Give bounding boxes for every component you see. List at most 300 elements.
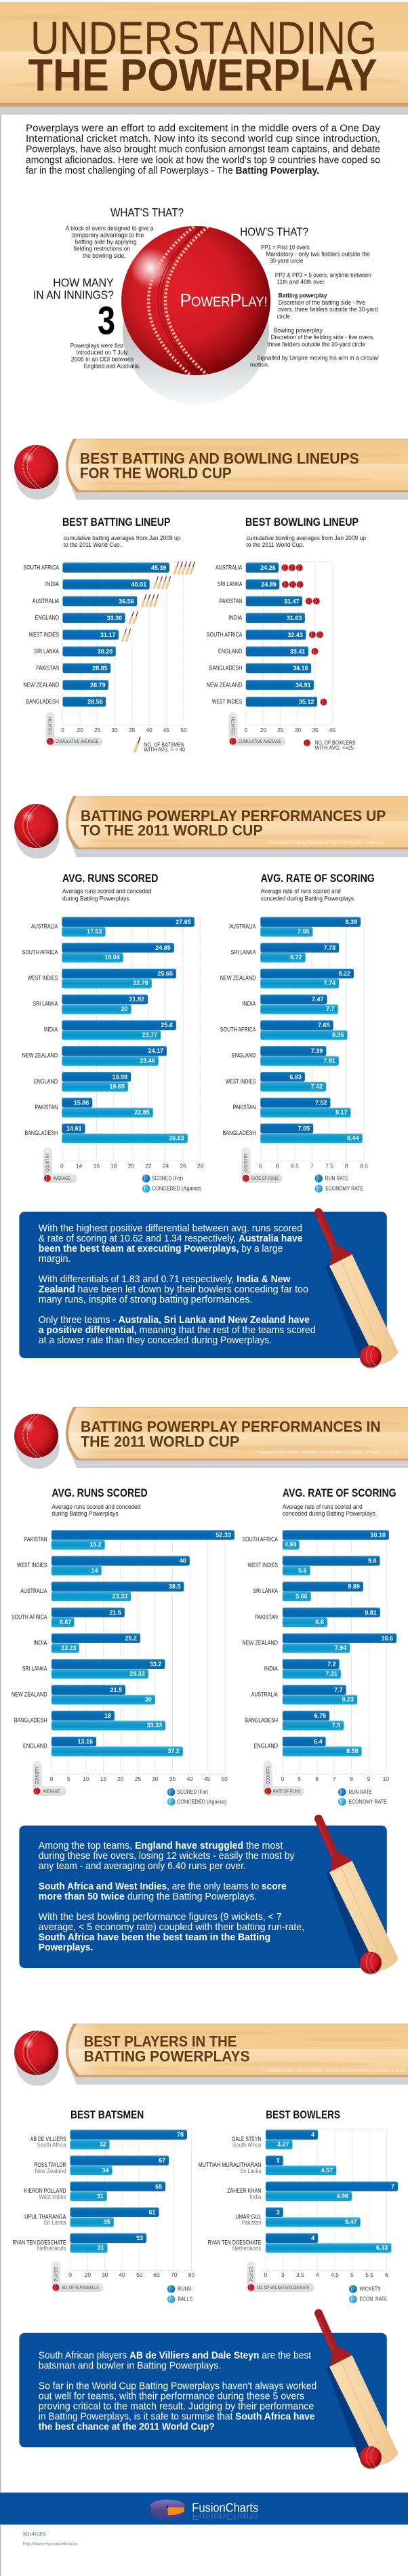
sources bbox=[23, 2531, 77, 2547]
heading: how's that: HOW'S THAT? bbox=[240, 225, 308, 238]
bars: West Indies: 25.65 bbox=[157, 970, 173, 977]
bars: New Zealand: 10.6 bbox=[381, 1635, 393, 1642]
bar: West Indies bbox=[29, 630, 119, 640]
section header: performances up to 2011: TO THE 2011 WORLD CUP bbox=[81, 822, 263, 839]
legend: scored and conceded: SCORED (For) bbox=[177, 1788, 208, 1795]
text: what's that: batting side by applying bbox=[75, 239, 137, 246]
bars: Australia: AUSTRALIA bbox=[251, 1691, 278, 1697]
bars: Ryan ten Doeschate: 4 bbox=[311, 2235, 314, 2242]
bar: Australia: 36.56 bbox=[119, 598, 134, 604]
axis legend: cumulative average: CUMULATIVE AVERAGE bbox=[56, 738, 99, 744]
bars: Sri Lanka: SRI LANKA bbox=[231, 948, 256, 955]
text: how's that: PP1 = First 10 overs bbox=[261, 244, 310, 251]
axis labels bbox=[68, 2271, 195, 2278]
bars: Sri Lanka: 20 bbox=[121, 1005, 127, 1012]
axis labels: 6 bbox=[315, 1775, 319, 1782]
bars: New Zealand: NEW ZEALAND bbox=[12, 1691, 47, 1697]
bars: South Africa: 7.65 bbox=[318, 1022, 330, 1029]
axis labels: 20 bbox=[117, 1775, 124, 1782]
legend: runs and balls bbox=[167, 2285, 192, 2303]
bars: New Zealand: 21.5 bbox=[110, 1687, 122, 1693]
section header: best players: BATTING POWERPLAYS bbox=[84, 2048, 249, 2064]
axis labels: 8 bbox=[345, 1162, 348, 1169]
bar: Bangladesh: BANGLADESH bbox=[209, 665, 242, 672]
axis legend: cumulative average: COUNTRY bbox=[230, 716, 236, 735]
bar: India bbox=[45, 579, 150, 590]
bar: Pakistan: PAKISTAN bbox=[36, 665, 59, 672]
bars: Pakistan: 8.17 bbox=[335, 1109, 347, 1115]
axis labels: 7 bbox=[310, 1162, 314, 1169]
bars: India: 25.6 bbox=[161, 1022, 173, 1029]
bars: Australia: 7.7 bbox=[334, 1687, 343, 1693]
panel heading: avg runs scored 2011: during Batting Powerplays. bbox=[52, 1510, 120, 1518]
callout: conclusion: So far in the World Cup Batting Powerplays haven't always worked bbox=[39, 2381, 317, 2392]
callout: conclusion: batsman and bowler in Batting Powerplays. bbox=[39, 2360, 221, 2372]
text: how's that: Bowling powerplay bbox=[274, 327, 323, 334]
axis labels: 6.5 bbox=[291, 1162, 299, 1169]
bars: India bbox=[33, 1634, 140, 1653]
bars: Bangladesh: BANGLADESH bbox=[223, 1130, 256, 1136]
bar: Sri Lanka bbox=[34, 647, 116, 657]
section header: best lineups: BEST BATTING AND BOWLING LINEUPS bbox=[80, 450, 359, 467]
legend: runs and balls: RUNS bbox=[178, 2286, 191, 2292]
bars: Sri Lanka bbox=[33, 995, 148, 1014]
bars: Australia: 27.65 bbox=[176, 919, 191, 925]
text: how's that: Batting powerplay bbox=[279, 292, 327, 300]
axis labels: 45 bbox=[163, 727, 169, 733]
heading: how many: HOW MANY bbox=[53, 276, 114, 290]
bars: India: 7.7 bbox=[326, 1005, 335, 1012]
legend: scored and conceded bbox=[167, 1788, 227, 1806]
text: how's that: 30-yard circle bbox=[270, 258, 304, 265]
intro paragraph: far in the most challenging of all Powerplays - The Batting Powerplay. bbox=[26, 166, 319, 176]
bars: West Indies bbox=[226, 1072, 326, 1092]
axis labels bbox=[264, 2271, 388, 2278]
legend: scored and conceded: SCORED (For) bbox=[152, 1175, 183, 1182]
axis labels: 28 bbox=[197, 1162, 204, 1169]
section header: performances in 2011: ** Updated till the match between Pakistan and Zimbabwe on March 14, 2011 bbox=[255, 1450, 399, 1455]
callout: conclusion bbox=[19, 2333, 387, 2447]
bars: Australia: 8.23 bbox=[342, 1696, 354, 1703]
bars: Pakistan: 15.2 bbox=[89, 1541, 102, 1548]
axis labels bbox=[281, 1775, 389, 1782]
section header: performances in 2011: THE 2011 WORLD CUP bbox=[81, 1434, 239, 1450]
callout: powerplay performances bbox=[19, 1212, 387, 1358]
bars: South Africa: 10.18 bbox=[370, 1532, 386, 1539]
page left border bbox=[0, 115, 1, 2576]
axis labels: 50 bbox=[136, 2271, 143, 2278]
axis labels bbox=[259, 1162, 368, 1169]
section header: performances in 2011: ** bbox=[240, 1436, 247, 1444]
axis labels: 35 bbox=[312, 727, 319, 733]
axis labels: 8 bbox=[350, 1775, 353, 1782]
bars: England: 7.39 bbox=[311, 1047, 323, 1054]
section header: best players: ** Updated till the match between Pakistan and Zimbabwe on March 14, 2011 bbox=[261, 2069, 405, 2073]
bars: New Zealand: NEW ZEALAND bbox=[242, 1639, 278, 1646]
bars: Sri Lanka: SRI LANKA bbox=[33, 1001, 58, 1007]
bars: Australia: 7.05 bbox=[298, 928, 309, 935]
bar: West Indies: 35.12 bbox=[299, 699, 314, 706]
bar: South Africa: SOUTH AFRICA bbox=[23, 564, 59, 571]
bars: New Zealand: 24.17 bbox=[148, 1047, 163, 1054]
bars: Australia bbox=[31, 917, 195, 937]
axis legend: average: COUNTRY bbox=[34, 1766, 40, 1784]
axis labels: 10 bbox=[83, 1775, 89, 1782]
bar: New Zealand bbox=[23, 680, 108, 690]
bars: Kieron Pollard: West Indies bbox=[39, 2193, 66, 2200]
bars: Pakistan: 6.6 bbox=[315, 1619, 324, 1626]
axis labels: 20 bbox=[128, 1162, 134, 1169]
bars: England: ENGLAND bbox=[232, 1052, 256, 1059]
axis legend: wickets and economy bbox=[247, 2261, 314, 2292]
legend: run rate and economy rate: ECONOMY RATE bbox=[348, 1798, 387, 1805]
bars: Bangladesh: BANGLADESH bbox=[245, 1716, 278, 1723]
bar: West Indies: WEST INDIES bbox=[212, 698, 242, 705]
text: how's that: Discretion of the batting side - five bbox=[279, 299, 365, 307]
legend: batsmen: WITH AVG. > = 40 bbox=[144, 746, 185, 753]
bars: West Indies: WEST INDIES bbox=[248, 1562, 278, 1569]
text: first introduced: 2005 in an ODI between bbox=[71, 355, 134, 363]
bars: Australia: 23.33 bbox=[113, 1593, 127, 1600]
bar: Australia: 24.26 bbox=[260, 564, 276, 571]
icons: bowlers with average under 25 bbox=[281, 564, 327, 706]
axis labels bbox=[50, 1775, 228, 1782]
legend: run rate and economy rate: ECONOMY RATE bbox=[325, 1185, 364, 1192]
axis labels: 0 bbox=[259, 1162, 262, 1169]
bars: West Indies: 9.6 bbox=[368, 1558, 377, 1564]
axis labels: 20 bbox=[77, 727, 83, 733]
axis legend: average: COUNTRY bbox=[45, 1153, 51, 1172]
bars: Ryan ten Doeschate: 53 bbox=[136, 2235, 143, 2242]
text: what's that: A block of overs designed to give a bbox=[66, 225, 154, 232]
legend: run rate and economy rate: RUN RATE bbox=[325, 1175, 349, 1182]
bars: India bbox=[44, 1020, 176, 1040]
panel heading: avg runs scored: during Batting Powerplays. bbox=[62, 895, 131, 902]
bars: New Zealand bbox=[242, 1634, 396, 1653]
axis labels: 10 bbox=[383, 1775, 389, 1782]
chart: avg rate of scoring 2011 bbox=[242, 1530, 396, 1782]
bars: India: 7.2 bbox=[327, 1661, 336, 1668]
legend: wickets and economy rate: WICKETS bbox=[359, 2286, 381, 2292]
callout: powerplay performances: Zealand have been let down by their bowlers conceding far too bbox=[39, 1284, 308, 1295]
bar: Pakistan: 28.85 bbox=[92, 665, 108, 672]
bars: Ryan ten Doeschate: 6.33 bbox=[376, 2244, 388, 2251]
axis labels: 5 bbox=[298, 1775, 301, 1782]
bar: India: 31.63 bbox=[287, 615, 302, 621]
bars: Australia: 8.39 bbox=[345, 919, 357, 925]
bar: Pakistan: 31.47 bbox=[284, 598, 300, 604]
bars: New Zealand: 7.94 bbox=[335, 1645, 346, 1651]
bars: England: ENGLAND bbox=[34, 1078, 58, 1085]
legend: scored and conceded: CONCEDED (Against) bbox=[177, 1798, 227, 1805]
bars: Ryan ten Doeschate bbox=[12, 2233, 146, 2253]
axis labels: 20 bbox=[85, 2271, 91, 2278]
axis legend: rate of runs bbox=[263, 1761, 304, 1796]
text: what's that: fielding restrictions on bbox=[74, 246, 130, 253]
axis labels: 5 bbox=[350, 2271, 354, 2278]
bars: Upul Tharanga: 61 bbox=[148, 2209, 156, 2216]
bars: Pakistan: 15.86 bbox=[74, 1099, 89, 1106]
axis labels bbox=[60, 1162, 204, 1169]
panel heading: avg rate of scoring 2011 bbox=[283, 1486, 396, 1518]
bars: Dale Steyn: DALE STEYN bbox=[232, 2136, 261, 2142]
bar: Sri Lanka: 30.20 bbox=[98, 649, 113, 655]
bars: England: 8.58 bbox=[346, 1748, 359, 1754]
text: what's that bbox=[66, 225, 154, 260]
bars: Kieron Pollard: KIERON POLLARD bbox=[24, 2187, 66, 2194]
callout: 2011 world cup performances: Among the top teams, England have struggled the most bbox=[39, 1840, 283, 1851]
bars: Umar Gul bbox=[235, 2208, 361, 2227]
legend: wickets and economy rate: ECON. RATE bbox=[359, 2296, 388, 2303]
callout: 2011 world cup performances: South Africa have been the best team in the Batting bbox=[39, 1931, 270, 1943]
bars: South Africa: 4.93 bbox=[285, 1541, 297, 1548]
axis labels: 25 bbox=[94, 727, 101, 733]
axis legend: cumulative average bbox=[46, 712, 103, 746]
axis labels: 25 bbox=[277, 727, 284, 733]
legend: bowlers bbox=[304, 739, 356, 751]
axis legend: cumulative average bbox=[228, 712, 285, 746]
bars: Pakistan: PAKISTAN bbox=[24, 1536, 47, 1543]
bars: New Zealand: 8.22 bbox=[338, 970, 350, 977]
bars: New Zealand bbox=[12, 1685, 155, 1704]
bar: New Zealand: 28.79 bbox=[90, 682, 106, 689]
intro paragraph: International cricket match. Now into its second world cup since introduction, bbox=[26, 134, 380, 145]
bars: England: ENGLAND bbox=[23, 1742, 47, 1749]
bars: Sri Lanka bbox=[231, 943, 339, 963]
bars: Dale Steyn bbox=[232, 2130, 318, 2149]
callout: powerplay performances: With differentials of 1.83 and 0.71 respectively, India & New bbox=[39, 1273, 291, 1285]
bars: Zaheer Khan: 7 bbox=[391, 2183, 394, 2190]
ball shadow bbox=[123, 258, 269, 404]
bars: Sri Lanka bbox=[22, 1659, 165, 1678]
logo: pie chart bbox=[150, 2499, 184, 2520]
legend: run rate and economy rate bbox=[338, 1788, 387, 1806]
bars: Ryan ten Doeschate: RYAN TEN DOESCHATE bbox=[12, 2239, 66, 2246]
icons: batsmen with average over 40 bbox=[122, 562, 195, 642]
bars: New Zealand: NEW ZEALAND bbox=[22, 1052, 58, 1059]
bars: Sri Lanka: SRI LANKA bbox=[253, 1588, 278, 1594]
axis labels: 6 bbox=[385, 2271, 388, 2278]
intro paragraph: amongst aficionados. Here we look at how the world's top 9 countries have coped so bbox=[26, 155, 380, 166]
axis labels: 50 bbox=[222, 1775, 228, 1782]
panel heading: best batting lineup: BEST BATTING LINEUP bbox=[62, 516, 170, 528]
callout: 2011 world cup performances: more than 50 twice during the Batting Powerplays. bbox=[39, 1891, 257, 1902]
bars: Sri Lanka: 6.72 bbox=[290, 954, 302, 961]
text: what's that: temporary advantage to the bbox=[73, 231, 144, 239]
axis labels: 8.5 bbox=[360, 1162, 368, 1169]
legend: wickets and economy rate bbox=[349, 2285, 388, 2303]
bar: England: 33.41 bbox=[290, 649, 305, 655]
bars: Bangladesh: 7.05 bbox=[298, 1125, 310, 1132]
axis labels: 40 bbox=[186, 1775, 193, 1782]
bars: AB de Villiers: 78 bbox=[177, 2132, 184, 2138]
bars: Australia: 38.5 bbox=[169, 1583, 180, 1590]
bar: New Zealand: 34.91 bbox=[295, 682, 310, 689]
axis legend: average: AVERAGE bbox=[54, 1175, 70, 1181]
panel heading: avg runs scored: Average runs scored and conceded bbox=[62, 888, 151, 896]
legend: runs and balls: BALLS bbox=[178, 2296, 192, 2303]
text: how's that: Signalled by Umpire moving his arm in a circular bbox=[257, 355, 379, 362]
callout: 2011 world cup performances: South Africa and West Indies, are the only teams to score bbox=[39, 1881, 287, 1892]
bars: Australia bbox=[251, 1685, 357, 1704]
bars: Muttiah Muralitharan: 4.57 bbox=[321, 2167, 333, 2174]
section header: best players bbox=[14, 2024, 408, 2086]
bars: Sri Lanka: 8.89 bbox=[348, 1583, 360, 1590]
legend: run rate and economy rate bbox=[314, 1174, 364, 1193]
axis labels: 18 bbox=[110, 1162, 117, 1169]
bar: England: ENGLAND bbox=[218, 648, 243, 655]
bars: India: INDIA bbox=[242, 1001, 256, 1007]
panel heading: avg runs scored 2011 bbox=[52, 1486, 148, 1518]
bar: Australia bbox=[33, 596, 137, 606]
bars: Pakistan: PAKISTAN bbox=[255, 1613, 278, 1620]
legend: bowlers: NO. OF BOWLERS bbox=[314, 739, 356, 746]
bars: Kieron Pollard bbox=[24, 2182, 165, 2201]
callout: powerplay performances: margin. bbox=[39, 1253, 70, 1265]
section header: best lineups: FOR THE WORLD CUP bbox=[80, 465, 232, 482]
chart: avg runs scored 2011 bbox=[12, 1530, 234, 1782]
axis labels: 40 bbox=[119, 2271, 125, 2278]
bar: England bbox=[218, 647, 308, 657]
bars: West Indies bbox=[28, 969, 176, 988]
bars: Ross Taylor: New Zealand bbox=[35, 2168, 66, 2174]
axis labels: 16 bbox=[94, 1162, 100, 1169]
bars: India: 7.47 bbox=[312, 996, 324, 1003]
bar: India: INDIA bbox=[45, 581, 59, 588]
title banner bbox=[0, 2, 408, 115]
callout: powerplay performances: & rate of scoring at 10.62 and 1.34 respectively, Australia have bbox=[39, 1233, 302, 1244]
callout: powerplay performances: Only three teams - Australia, Sri Lanka and New Zealand have bbox=[39, 1314, 310, 1326]
panel heading: best bowling lineup bbox=[245, 516, 366, 549]
bars: India: 25.2 bbox=[125, 1635, 137, 1642]
footer band: FusionCharts bbox=[192, 2512, 258, 2521]
bars: England: ENGLAND bbox=[253, 1742, 278, 1749]
callout: powerplay performances: a positive differential, meaning that the rest of the teams scored bbox=[39, 1324, 316, 1336]
axis labels: 30 bbox=[102, 2271, 108, 2278]
axis labels: 3.5 bbox=[296, 2271, 304, 2278]
bars: India: 13.23 bbox=[61, 1645, 77, 1651]
bars: Sri Lanka: 5.66 bbox=[295, 1593, 308, 1600]
bars: Bangladesh: 26.63 bbox=[169, 1134, 184, 1141]
bars: Zaheer Khan bbox=[227, 2182, 398, 2201]
bars: South Africa bbox=[242, 1530, 389, 1550]
bar: India bbox=[228, 613, 305, 623]
bars: Pakistan bbox=[255, 1607, 380, 1627]
axis legend: average bbox=[33, 1761, 66, 1796]
bars: Bangladesh: BANGLADESH bbox=[24, 1130, 58, 1136]
bars: South Africa bbox=[220, 1020, 347, 1040]
bars: AB de Villiers: AB DE VILLIERS bbox=[30, 2136, 66, 2142]
bars: West Indies: WEST INDIES bbox=[226, 1078, 256, 1085]
axis labels bbox=[61, 727, 187, 733]
bars: Muttiah Muralitharan: MUTTIAH MURALITHARAN bbox=[198, 2161, 261, 2168]
panel heading: avg runs scored 2011: Average runs scored and conceded bbox=[52, 1503, 140, 1511]
axis labels: 70 bbox=[171, 2271, 178, 2278]
bars: West Indies: 6.83 bbox=[289, 1073, 302, 1080]
icon: bat and ball bbox=[319, 1212, 399, 1368]
bars: Umar Gul: 3 bbox=[277, 2209, 280, 2216]
panel heading: avg rate of scoring 2011: Average rate of runs scored and bbox=[283, 1503, 363, 1511]
bar: New Zealand bbox=[207, 680, 314, 690]
panel heading: avg runs scored 2011: AVG. RUNS SCORED bbox=[52, 1486, 148, 1499]
bars: Upul Tharanga: Sri Lanka bbox=[44, 2219, 66, 2226]
bar: South Africa bbox=[207, 630, 306, 640]
bars: Bangladesh: 18 bbox=[104, 1712, 111, 1719]
text: how's that: three fielders outside the 30-yard circle bbox=[268, 341, 365, 348]
section header: performances in 2011 bbox=[14, 1407, 408, 1469]
bars: Upul Tharanga bbox=[24, 2208, 159, 2227]
callout: powerplay performances: With the highest positive differential between avg. runs scored bbox=[39, 1223, 302, 1234]
number: 3: 3 bbox=[98, 299, 115, 343]
text: how's that: motion. bbox=[250, 362, 269, 369]
callout: conclusion: out well for teams, with their performance during these 5 overs bbox=[39, 2391, 304, 2402]
chart: best bowlers bbox=[198, 2129, 398, 2278]
axis legend: runs and balls: NO. OF RUNS/BALLS bbox=[62, 2284, 99, 2290]
bars: AB de Villiers bbox=[30, 2130, 187, 2149]
panel heading: avg runs scored: AVG. RUNS SCORED bbox=[62, 872, 158, 885]
callout: 2011 world cup performances bbox=[19, 1826, 387, 1968]
bars: Australia bbox=[229, 917, 361, 937]
section header: performances in 2011: BATTING POWERPLAY PERFORMANCES IN bbox=[81, 1419, 381, 1436]
callout: conclusion: South African players AB de Villiers and Dale Steyn are the best bbox=[39, 2350, 312, 2362]
bars: India: INDIA bbox=[264, 1665, 278, 1672]
panel heading: avg rate of scoring 2011: conceded during Batting Powerplays. bbox=[283, 1510, 377, 1518]
section header: performances up to 2011: * bbox=[263, 824, 266, 832]
axis legend: runs and balls: PLAYER bbox=[53, 2267, 59, 2281]
callout: conclusion: the best chance at the 2011 World Cup? bbox=[39, 2421, 215, 2433]
bars: Kieron Pollard: 31 bbox=[97, 2193, 104, 2199]
callout: powerplay performances: many runs, inspite of strong batting performances. bbox=[39, 1294, 252, 1305]
text: how's that: circle bbox=[277, 313, 290, 320]
bars: AB de Villiers: South Africa bbox=[37, 2142, 66, 2149]
bars: Australia: 17.03 bbox=[87, 928, 102, 935]
bars: West Indies: WEST INDIES bbox=[17, 1562, 47, 1569]
intro paragraph bbox=[26, 123, 381, 176]
bars: Upul Tharanga: 35 bbox=[104, 2218, 110, 2225]
axis legend: average: AVERAGE bbox=[43, 1788, 60, 1794]
bars: Bangladesh: 6.75 bbox=[314, 1712, 326, 1719]
bar: South Africa: 32.43 bbox=[287, 632, 303, 638]
bars: Bangladesh bbox=[14, 1711, 165, 1731]
bars: Bangladesh bbox=[223, 1123, 363, 1143]
panel heading: best bowling lineup: BEST BOWLING LINEUP bbox=[245, 516, 359, 528]
panel heading: avg rate of scoring: Average rate of runs scored and bbox=[261, 888, 341, 896]
bars: Sri Lanka: 7.78 bbox=[324, 944, 335, 951]
panel heading: avg runs scored bbox=[62, 872, 158, 902]
panel heading: best bowling lineup: cumulative bowling averages from Jan 2009 up bbox=[247, 535, 366, 542]
bars: England bbox=[23, 1737, 183, 1756]
bars: Muttiah Muralitharan bbox=[198, 2155, 336, 2175]
text: first introduced: introduced on 7 July bbox=[76, 349, 128, 356]
bars: Ryan ten Doeschate bbox=[208, 2233, 391, 2253]
panel heading: best batsmen: BEST BATSMEN bbox=[70, 2108, 144, 2121]
text: first introduced: Powerplays were first bbox=[70, 342, 124, 349]
axis legend: rate of runs: COUNTRY bbox=[265, 1766, 271, 1784]
text: how's that: PP2 & PP3 = 5 overs, anytime between bbox=[275, 271, 371, 279]
bars: Australia bbox=[20, 1581, 184, 1601]
bars: Umar Gul: 5.47 bbox=[345, 2218, 357, 2225]
callout: conclusion: proving critical to the match result. Judging by their performance bbox=[39, 2401, 314, 2412]
bars: Ryan ten Doeschate: Netherlands bbox=[232, 2245, 262, 2252]
sources: SOURCES: bbox=[23, 2531, 47, 2537]
axis labels: 0 bbox=[50, 1775, 54, 1782]
bar: Australia: AUSTRALIA bbox=[33, 598, 59, 604]
bar: South Africa: 45.39 bbox=[151, 564, 166, 571]
bars: West Indies: WEST INDIES bbox=[28, 975, 58, 982]
bar: Sri Lanka: SRI LANKA bbox=[34, 648, 59, 655]
bar: South Africa bbox=[23, 562, 169, 573]
bars: Dale Steyn: 3.27 bbox=[277, 2141, 289, 2148]
